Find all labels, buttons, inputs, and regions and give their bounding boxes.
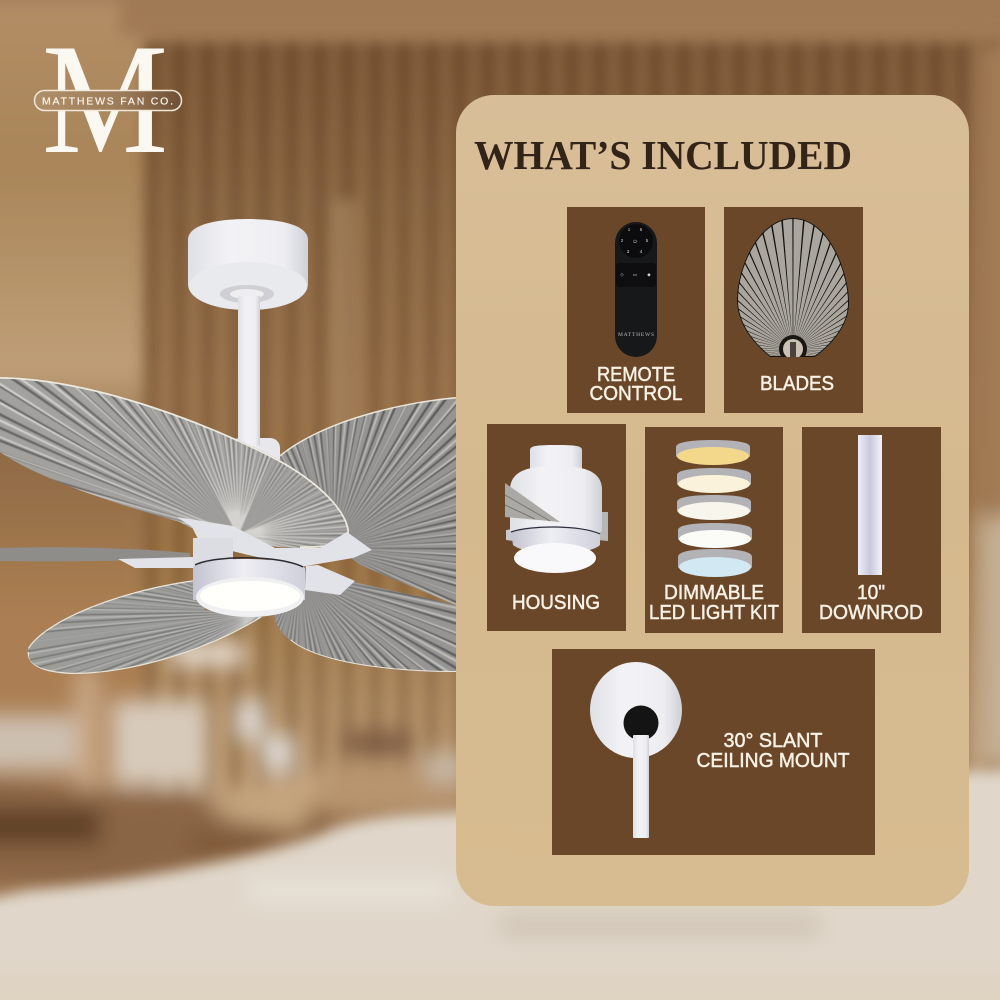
icon: remote control: 6 (640, 227, 643, 232)
label (649, 582, 779, 624)
motor housing with light (193, 538, 305, 617)
fan blade: edge-on left (0, 547, 190, 561)
tile: blades (724, 207, 863, 413)
logo: Matthews Fan Co.: M (42, 12, 168, 187)
label: DOWNROD (819, 602, 923, 624)
label: DIMMABLE (664, 582, 764, 604)
ceiling fan photo (0, 219, 456, 674)
label: LED LIGHT KIT (649, 602, 779, 624)
tile: slant ceiling mount (552, 649, 875, 855)
logo: Matthews Fan Co.: MATTHEWS FAN CO. (42, 96, 173, 108)
panel: what's included (456, 95, 969, 906)
icon: downrod (858, 435, 882, 575)
heading: WHAT’S INCLUDED (474, 132, 852, 178)
icon: LED colour temperature discs (676, 440, 752, 577)
label: 10" (857, 582, 885, 604)
label (696, 730, 850, 772)
icon: remote control: 5 (646, 238, 649, 243)
label (590, 364, 682, 405)
label: CEILING MOUNT (696, 750, 850, 772)
fan blade: lower right (274, 571, 456, 672)
blade brackets (118, 517, 372, 595)
label: REMOTE (597, 364, 675, 386)
fan blade: upper left (0, 377, 349, 548)
fan blade: lower left (28, 580, 262, 674)
label: BLADES (760, 373, 834, 395)
icon: remote control: 3 (627, 249, 630, 254)
tile: housing (487, 424, 626, 631)
tile: dimmable LED light kit (645, 427, 783, 633)
icon: remote control (615, 222, 657, 357)
icon: remote control: 4 (640, 249, 643, 254)
icon: remote control: 1 (628, 227, 631, 232)
downrod, canopy and motor top (188, 219, 308, 468)
tile: 10 inch downrod (802, 427, 941, 633)
fan blade: right (280, 397, 456, 605)
label: CONTROL (590, 383, 682, 405)
icon: remote control: ◇ (620, 272, 624, 277)
label (819, 582, 923, 624)
icon: remote control: MATTHEWS (618, 332, 654, 338)
icon: remote control: ◆ (647, 272, 651, 277)
label: 30° SLANT (724, 730, 822, 752)
icon: motor housing (505, 445, 608, 573)
tile: remote control (567, 207, 705, 413)
icon: slant mount (590, 662, 682, 838)
icon: remote control: ▭ (633, 272, 638, 277)
icon: palm blade (737, 218, 849, 357)
label: HOUSING (512, 592, 600, 614)
icon: remote control: ⏻ (633, 239, 637, 244)
icon: remote control: 2 (621, 238, 624, 243)
